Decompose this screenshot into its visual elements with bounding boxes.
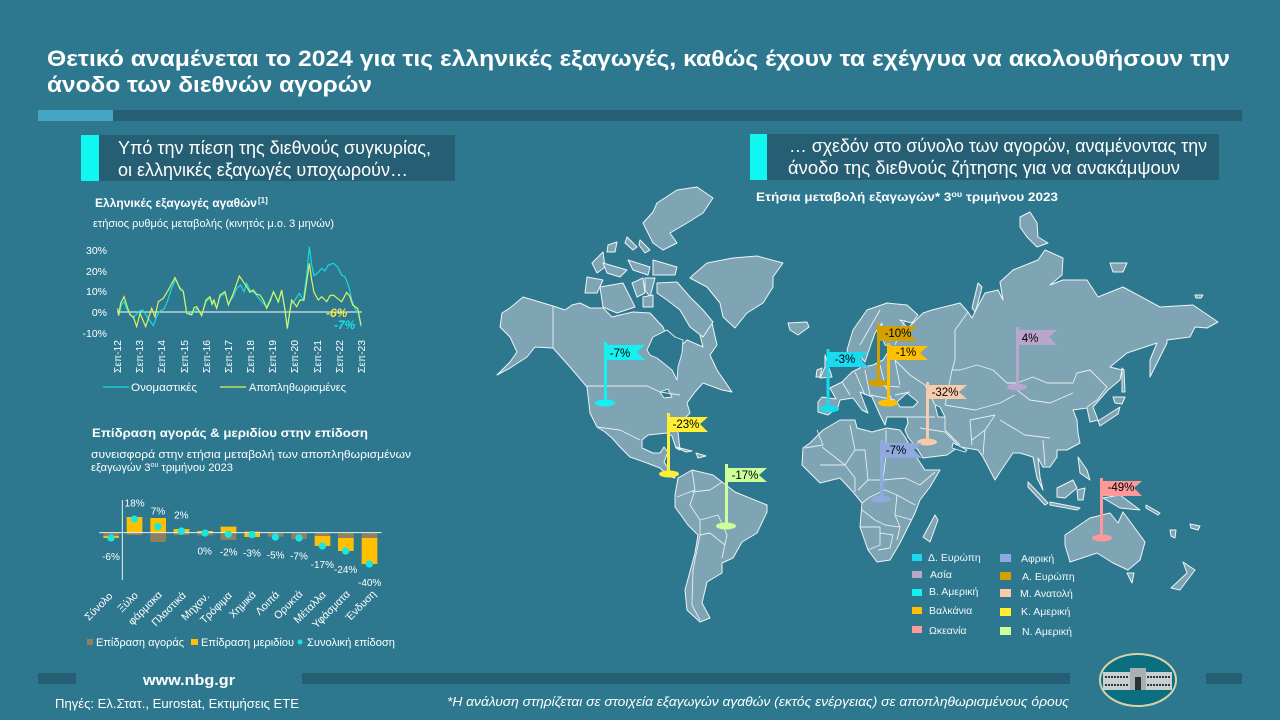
panel heading: left — [81, 135, 455, 181]
bar chart legend: Συνολική επίδοση — [307, 637, 395, 649]
sources: Πηγές: Ελ.Στατ., Eurostat, Εκτιμήσεις ΕΤΕ — [55, 697, 299, 711]
bar chart: contribution by sector: Ξύλο — [115, 590, 141, 615]
Sakhalin — [1122, 368, 1125, 392]
Pacific islands — [1146, 505, 1160, 515]
x axis labels: Σεπ-17 — [223, 340, 235, 373]
flag: Balkans: -1% — [896, 347, 916, 359]
bar chart: contribution by sector: Μέταλλα — [292, 589, 329, 626]
panel heading: right: … σχεδόν στο σύνολο των αγορών, αναμένοντας την — [789, 135, 1207, 156]
Indonesia and Philippines — [1028, 482, 1048, 505]
x axis labels: Σεπ-23 — [356, 340, 368, 373]
bar chart: contribution by sector: φάρμακα — [126, 589, 165, 628]
panel heading: left: οι ελληνικές εξαγωγές υποχωρούν… — [118, 159, 408, 180]
chart heading: market and share effect: ου — [151, 462, 158, 469]
map legend: Μ. Ανατολή — [1020, 588, 1073, 600]
New Zealand — [1171, 562, 1195, 590]
bar chart: contribution by sector: -6% — [102, 552, 120, 563]
bar chart: contribution by sector: Μηχαν. — [179, 590, 212, 623]
map legend: Ωκεανία — [929, 625, 967, 637]
panel heading: right — [750, 134, 1219, 180]
map legend: Α. Ευρώπη — [1022, 571, 1075, 583]
Africa — [802, 420, 940, 562]
chart heading: market and share effect: Επίδραση αγοράς & μεριδίου στην επίδοση — [92, 426, 368, 440]
bar chart: contribution by sector: -17% — [311, 560, 334, 571]
x axis labels: Σεπ-14 — [156, 340, 168, 373]
flag: Western Europe: -3% — [835, 354, 855, 366]
flag: North America — [595, 342, 645, 406]
bar chart: contribution by sector: -2% — [220, 548, 238, 559]
flag: Oceania: -49% — [1108, 482, 1134, 494]
bar chart legend — [87, 637, 395, 649]
bar chart: contribution by sector: 0% — [197, 547, 212, 558]
flag: Africa — [871, 440, 922, 502]
website: www.nbg.gr — [142, 672, 235, 689]
flag: Middle East: -32% — [932, 387, 958, 399]
line chart legend: Αποπληθωρισμένες — [249, 382, 346, 394]
bar chart: contribution by sector: Υφάσματα — [310, 588, 353, 631]
line chart legend — [103, 382, 346, 394]
Japan — [1113, 397, 1125, 404]
chart heading: market and share effect — [91, 426, 412, 474]
y axis labels: 10% — [86, 286, 107, 298]
flag: Asia — [1007, 327, 1057, 390]
x axis labels: Σεπ-13 — [134, 340, 146, 373]
Devon — [653, 260, 677, 275]
UK — [820, 355, 832, 378]
flag: Asia: 4% — [1022, 333, 1038, 345]
Great Lakes — [660, 389, 672, 398]
bar chart: contribution by sector: -24% — [334, 565, 357, 576]
x axis labels: Σεπ-22 — [334, 340, 346, 373]
footer bars — [38, 673, 1242, 684]
bar chart: contribution by sector: -40% — [358, 578, 381, 589]
map legend — [912, 552, 1075, 638]
flag: South America — [716, 464, 767, 530]
map legend: Αφρική — [1021, 553, 1054, 565]
chart heading: market and share effect: εξαγωγών 3 — [91, 462, 150, 474]
Greenland — [690, 256, 783, 328]
bar chart: contribution by sector — [83, 499, 382, 631]
map legend: Κ. Αμερική — [1021, 606, 1071, 618]
nominal series — [118, 247, 361, 329]
y axis labels: -10% — [82, 328, 107, 340]
North America — [497, 297, 732, 478]
y axis labels: 0% — [92, 307, 107, 319]
title: άνοδο των διεθνών αγορών — [47, 72, 372, 97]
x axis labels: Σεπ-12 — [112, 340, 124, 373]
Ireland — [816, 368, 822, 377]
x axis labels: Σεπ-18 — [245, 340, 257, 373]
header rule — [38, 110, 1242, 121]
panel heading: left: Υπό την πίεση της διεθνούς συγκυρίας, — [118, 137, 431, 158]
title: Θετικό αναμένεται το 2024 για τις ελληνικές εξαγωγές, καθώς έχουν τα εχέγγυα να ακολουθήσουν την — [47, 46, 1230, 71]
x axis labels — [112, 340, 368, 373]
y axis labels: 20% — [86, 266, 107, 278]
line chart: export growth: -6% — [326, 306, 348, 320]
chart heading: Greek goods exports: ετήσιος ρυθμός μεταβολής (κινητός μ.ο. 3 μηνών) — [93, 218, 334, 230]
Banks — [585, 277, 603, 293]
flag: Western Europe — [819, 349, 868, 412]
bar chart: contribution by sector: -3% — [243, 549, 261, 560]
flag: Central America: -23% — [673, 419, 699, 431]
Madagascar — [923, 515, 938, 542]
flag: Balkans — [878, 343, 928, 406]
chart heading: Greek goods exports: [1] — [258, 196, 268, 205]
Arctic islands — [1020, 212, 1048, 247]
x axis labels: Σεπ-15 — [179, 340, 191, 373]
title — [47, 46, 1230, 97]
bar chart: contribution by sector: -5% — [267, 550, 285, 561]
chart heading: Greek goods exports: Ελληνικές εξαγωγές αγαθών — [95, 196, 257, 210]
x axis labels: Σεπ-20 — [289, 340, 301, 373]
map legend: Ασία — [930, 569, 952, 581]
bar chart legend: Επίδραση μεριδίου — [201, 637, 294, 649]
bar chart: contribution by sector: -7% — [290, 552, 308, 563]
Baffin — [657, 282, 713, 337]
bar chart: contribution by sector: 18% — [125, 499, 145, 510]
line chart: export growth — [82, 245, 368, 373]
line chart legend: Ονομαστικές — [131, 382, 197, 394]
bar chart: contribution by sector: 2% — [174, 511, 189, 522]
Black Sea — [897, 393, 918, 407]
bar chart: contribution by sector: Χημικά — [227, 589, 259, 621]
Ellesmere — [643, 187, 713, 250]
bar chart legend: Επίδραση αγοράς — [96, 637, 184, 649]
map legend: Βαλκάνια — [929, 605, 972, 617]
panel heading: right: άνοδο της διεθνούς ζήτησης για να ανακάμψουν — [788, 157, 1180, 178]
Persian Gulf — [952, 443, 967, 452]
map subtitle: ου — [951, 190, 963, 199]
y axis labels — [82, 245, 107, 340]
bar chart: contribution by sector: Τρόφιμα — [198, 590, 235, 626]
footnote: *Η ανάλυση στηρίζεται σε στοιχεία εξαγωγών αγαθών (εκτός ενέργειας) σε αποπληθωρισμένους όρους — [447, 695, 1070, 709]
map legend: Β. Αμερική — [929, 586, 979, 598]
x axis labels: Σεπ-19 — [267, 340, 279, 373]
x axis labels: Σεπ-16 — [201, 340, 213, 373]
map legend: Δ. Ευρώπη — [928, 552, 981, 564]
chart heading: market and share effect: συνεισφορά στην ετήσια μεταβολή των αποπληθωρισμένων — [91, 449, 412, 461]
flag: North America: -7% — [610, 348, 630, 360]
map legend: Ν. Αμερική — [1022, 626, 1072, 638]
flag: Eastern Europe: -10% — [885, 328, 911, 340]
map subtitle: τριμήνου 2023 — [962, 190, 1058, 204]
flag: South America: -17% — [732, 470, 758, 482]
South America — [675, 470, 767, 622]
logo: bank building — [1100, 654, 1176, 706]
flag: Middle East — [917, 382, 967, 446]
Eurasia — [818, 250, 1218, 490]
map subtitle: Ετήσια μεταβολή εξαγωγών* 3 — [756, 190, 930, 204]
world map — [497, 187, 1218, 622]
flag: Oceania — [1092, 478, 1142, 542]
bar chart: contribution by sector: 7% — [151, 507, 165, 518]
bar chart: contribution by sector: Λοιπά — [253, 589, 282, 618]
bar chart: contribution by sector: Σύνολο — [83, 590, 116, 623]
Caribbean — [676, 447, 692, 452]
Victoria — [600, 283, 635, 313]
y axis labels: 30% — [86, 245, 107, 257]
Australia — [1065, 512, 1145, 570]
Novaya Zemlya — [972, 283, 982, 312]
bar chart: contribution by sector: Ένδυση — [343, 588, 379, 624]
Caspian — [935, 405, 945, 417]
flag: Africa: -7% — [886, 445, 906, 457]
flag: Central America — [659, 413, 708, 478]
chart heading: market and share effect: τριμήνου 2023 — [158, 462, 233, 474]
chart heading: Greek goods exports — [93, 196, 334, 230]
Hudson Bay — [647, 330, 683, 380]
Iceland — [788, 322, 809, 335]
bar chart: contribution by sector: Πλαστικά — [150, 590, 189, 629]
line chart: export growth: -7% — [334, 318, 356, 332]
bar chart: contribution by sector: Ορυκτά — [272, 588, 305, 622]
flag: Eastern Europe — [868, 323, 917, 386]
map subtitle — [756, 190, 1058, 204]
real series — [118, 263, 361, 328]
x axis labels: Σεπ-21 — [312, 340, 324, 373]
